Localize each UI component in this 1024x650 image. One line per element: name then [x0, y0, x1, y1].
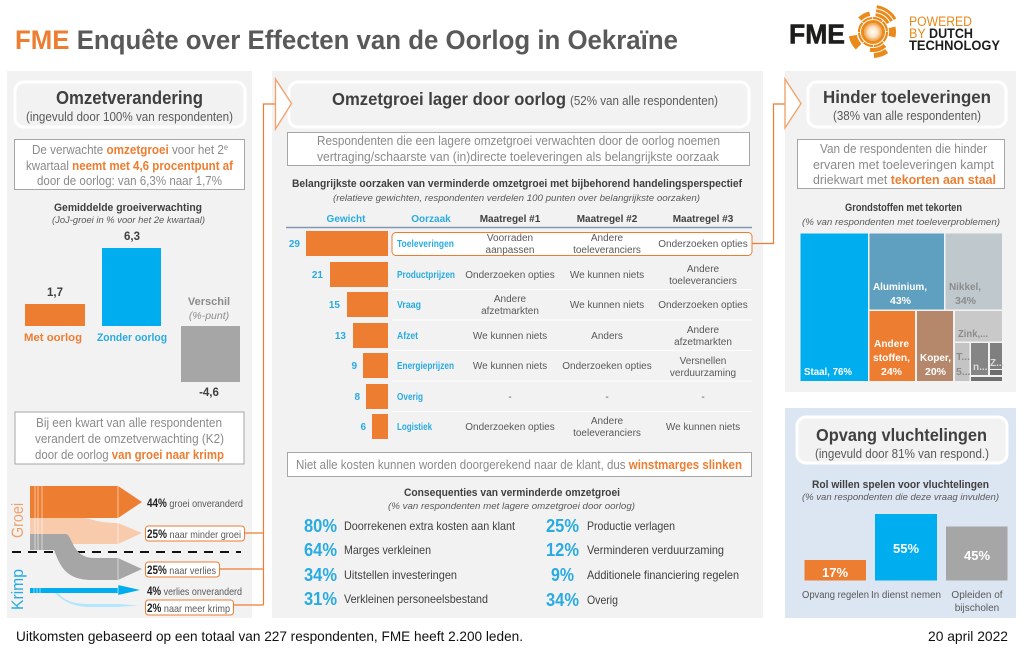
- row: toeleveringen: 29: [289, 239, 300, 250]
- label: 25% naar verlies: 25% naar verlies: [147, 565, 216, 577]
- row: overig: [354, 384, 705, 409]
- treemap: grondstoffen: Z...: [990, 358, 1005, 369]
- row: vraag: 15: [329, 300, 340, 311]
- bar chart: rol vluchtelingen: 45%: [964, 548, 990, 563]
- row: productprijzen: Onderzoeken opties: [465, 270, 555, 281]
- row: productprijzen: toeleveranciers: [669, 276, 737, 287]
- chart heading: rol vluchtelingen: [802, 479, 999, 503]
- list: consequenties rechts: 34%: [546, 590, 579, 610]
- row: logistiek: Andere: [591, 416, 624, 427]
- logo: FME powered by Dutch Technology: TECHNOLOGY: [909, 38, 1000, 53]
- callout: van groei naar krimp: Bij een kwart van alle respondenten: [36, 416, 222, 430]
- panel: opvang vluchtelingen: [785, 408, 1016, 618]
- row: toeleveringen: toeleveranciers: [573, 245, 641, 256]
- list: consequenties rechts: [546, 516, 739, 610]
- list: consequenties links: 34%: [304, 565, 337, 585]
- row: vraag: [329, 292, 748, 317]
- callout: belangrijkste oorzaak: Respondenten die een lagere omzetgroei verwachten door de oorlog noemen: [317, 134, 720, 148]
- treemap: grondstoffen: 5...: [956, 366, 971, 378]
- treemap: grondstoffen: Nikkel,: [949, 281, 981, 293]
- treemap: grondstoffen: 43%: [890, 295, 912, 307]
- panel: omzetgroei lager: [272, 71, 763, 618]
- heading: hinder toeleveringen: (38% van alle respondenten): [833, 109, 981, 123]
- list: consequenties links: 80%: [304, 516, 337, 536]
- heading: hinder toeleveringen: [808, 82, 1006, 127]
- row: afzet: Andere: [687, 325, 720, 336]
- title: FME Enquête over Effecten van de Oorlog in Oekraïne: [15, 25, 678, 55]
- heading: opvang vluchtelingen: [797, 417, 1007, 463]
- bar chart: groeiverwachting: -4,6: [199, 387, 219, 399]
- callout: winstmarges slinken: [288, 452, 752, 476]
- row: toeleveringen: Toeleveringen: [397, 238, 454, 250]
- callout: winstmarges slinken: Niet alle kosten kunnen worden doorgerekend naar de klant, dus winstmarges slinken: [296, 458, 742, 472]
- treemap: grondstoffen: Zink,...: [958, 328, 988, 340]
- bar chart: groeiverwachting: (%-punt): [189, 310, 229, 322]
- bar chart: rol vluchtelingen: Opleiden of: [951, 590, 1003, 601]
- row: energieprijzen: We kunnen niets: [473, 361, 547, 372]
- arrow: midden naar rechts: [752, 104, 785, 244]
- label: 25% naar minder groei: 25% naar minder groei: [147, 529, 241, 541]
- heading: consequenties: (% van respondenten met lagere omzetgroei door oorlog): [388, 501, 635, 512]
- list: consequenties rechts: 9%: [551, 565, 574, 585]
- row: toeleveringen: aanpassen: [486, 245, 534, 256]
- callout: omzetgroei: De verwachte omzetgroei voor het 2: [32, 143, 228, 157]
- bar chart: rol vluchtelingen: In dienst nemen: [871, 590, 941, 601]
- list: consequenties rechts: 12%: [546, 540, 579, 560]
- panel: hinder toeleveringen: [785, 71, 1016, 392]
- list: consequenties links: [304, 516, 516, 609]
- heading: omzetgroei lager door oorlog: (52% van alle respondenten): [570, 94, 718, 108]
- row: productprijzen: Productprijzen: [397, 269, 455, 281]
- chart heading: rol vluchtelingen: Rol willen spelen voor vluchtelingen: [812, 479, 989, 491]
- row: logistiek: Onderzoeken opties: [465, 422, 555, 433]
- list: consequenties rechts: Productie verlagen: [587, 519, 675, 533]
- bar chart: groeiverwachting: 1,7: [47, 287, 63, 299]
- sankey diagram: groei en krimp: Groei: [8, 503, 27, 538]
- callout: tekorten aan staal: driekwart met tekorten aan staal: [813, 173, 996, 187]
- bar chart: rol vluchtelingen: [802, 514, 1008, 614]
- table heading: [292, 178, 742, 204]
- list: consequenties links: Verkleinen personeelsbestand: [344, 592, 488, 606]
- bar chart: groeiverwachting: Met oorlog: [24, 332, 82, 344]
- treemap: grondstoffen: Aluminium,: [873, 281, 927, 293]
- panel: omzetverandering: [7, 71, 252, 618]
- row: overig: 8: [354, 392, 360, 403]
- chart heading: groeiverwachting: [52, 202, 205, 226]
- heading: consequenties: [388, 487, 635, 512]
- heading: omzetgroei lager door oorlog: [289, 82, 749, 127]
- row: energieprijzen: verduurzaming: [670, 368, 736, 379]
- bar chart: groeiverwachting: Verschil: [188, 296, 230, 308]
- treemap: grondstoffen: Andere: [874, 338, 909, 350]
- treemap: grondstoffen: n...: [973, 362, 988, 373]
- list: consequenties links: Uitstellen investeringen: [344, 568, 457, 582]
- row: afzet: 13: [335, 331, 346, 342]
- row: vraag: We kunnen niets: [570, 300, 644, 311]
- row: energieprijzen: [351, 353, 736, 379]
- row: productprijzen: 21: [312, 270, 323, 281]
- row: afzet: Anders: [591, 331, 623, 342]
- bar chart: rol vluchtelingen: 17%: [822, 565, 848, 580]
- heading: omzetgroei lager door oorlog: Omzetgroei lager door oorlog: [332, 89, 566, 109]
- treemap: grondstoffen: [800, 234, 1005, 381]
- row: logistiek: 6: [360, 422, 366, 433]
- table heading: (relatieve gewichten, respondenten verdelen 100 punten over belangrijkste oorzaken): [333, 193, 700, 204]
- label: 4% verlies onveranderd: 4% verlies onveranderd: [147, 586, 242, 598]
- callout: tekorten aan staal: [798, 140, 1004, 188]
- callout: van groei naar krimp: verandert de omzetverwachting (K2): [35, 432, 224, 446]
- list: consequenties links: 31%: [304, 589, 337, 609]
- logo: FME powered by Dutch Technology: POWERED: [909, 14, 972, 29]
- callout: omzetgroei: door de oorlog: van 6,3% naar 1,7%: [37, 174, 222, 188]
- row: afzet: We kunnen niets: [473, 331, 547, 342]
- table header: Maatregel #3: [673, 214, 734, 225]
- treemap: grondstoffen: T...: [956, 351, 970, 363]
- treemap: grondstoffen: Staal, 76%: [804, 366, 853, 378]
- bar chart: rol vluchtelingen: bijscholen: [955, 603, 999, 614]
- logo: FME powered by Dutch Technology: FME: [789, 18, 845, 50]
- callout: omzetgroei: [14, 140, 244, 190]
- chart heading: groeiverwachting: Gemiddelde groeiverwachting: [54, 202, 202, 214]
- row: toeleveringen: Andere: [591, 233, 624, 244]
- row: logistiek: [360, 414, 740, 439]
- list: consequenties rechts: Verminderen verduurzaming: [587, 543, 724, 557]
- bar chart: groeiverwachting: Zonder oorlog: [97, 332, 167, 344]
- row: energieprijzen: Energieprijzen: [397, 360, 454, 372]
- heading: consequenties: Consequenties van verminderde omzetgroei: [404, 487, 620, 499]
- list: consequenties links: Doorrekenen extra kosten aan klant: [344, 519, 516, 533]
- row: toeleveringen: [289, 231, 748, 256]
- bar chart: rol vluchtelingen: 55%: [893, 541, 919, 556]
- treemap: grondstoffen: 34%: [955, 295, 977, 307]
- callout: van groei naar krimp: door de oorlog van groei naar krimp: [35, 448, 224, 462]
- heading: omzetverandering: Omzetverandering: [56, 88, 203, 108]
- callout: van groei naar krimp: [15, 412, 244, 464]
- row: vraag: Onderzoeken opties: [658, 300, 748, 311]
- row: overig: -: [508, 392, 512, 403]
- row: productprijzen: [312, 262, 737, 287]
- logo: FME powered by Dutch Technology: BY DUTCH: [909, 26, 973, 41]
- sankey diagram: groei en krimp: Krimp: [8, 569, 27, 610]
- list: consequenties rechts: Overig: [587, 593, 618, 607]
- logo: FME powered by Dutch Technology: [789, 0, 1000, 65]
- table row separators: [392, 290, 752, 412]
- callout: omzetgroei: kwartaal neemt met 4,6 procentpunt af: [26, 159, 234, 173]
- heading: omzetverandering: (ingevuld door 100% van respondenten): [26, 110, 233, 124]
- footer: respondenten: Uitkomsten gebaseerd op een totaal van 227 respondenten, FME heeft 2.200 leden.: [16, 628, 523, 644]
- chart heading: grondstoffen: [802, 202, 1000, 228]
- row: logistiek: We kunnen niets: [666, 422, 740, 433]
- highlight: rij toeleveringen: [392, 232, 752, 256]
- heading: opvang vluchtelingen: Opvang vluchtelingen: [816, 425, 987, 445]
- treemap: grondstoffen: 20%: [925, 366, 947, 378]
- arrow head: naar hinder toeleveringen: [785, 79, 801, 128]
- row: logistiek: Logistiek: [397, 421, 432, 433]
- row: overig: -: [605, 392, 609, 403]
- row: energieprijzen: Onderzoeken opties: [562, 361, 652, 372]
- list: consequenties rechts: Additionele financiering regelen: [587, 568, 739, 582]
- row: afzet: afzetmarkten: [674, 337, 732, 348]
- table header: Gewicht: [327, 214, 366, 225]
- treemap: grondstoffen: Koper,: [920, 352, 951, 364]
- callout: omzetgroei: e: [224, 143, 229, 152]
- treemap: grondstoffen: 24%: [881, 366, 903, 378]
- chart heading: groeiverwachting: (JoJ-groei in % voor het 2e kwartaal): [52, 215, 205, 226]
- bar chart: groeiverwachting: [24, 231, 240, 399]
- row: vraag: Andere: [494, 294, 527, 305]
- table header: Maatregel #1: [480, 214, 541, 225]
- row: afzet: Afzet: [397, 330, 418, 342]
- heading: opvang vluchtelingen: (ingevuld door 81% van respond.): [815, 447, 989, 461]
- row: logistiek: toeleveranciers: [573, 428, 641, 439]
- bar chart: groeiverwachting: 6,3: [124, 231, 140, 243]
- callout: tekorten aan staal: Van de respondenten die hinder: [820, 142, 987, 156]
- heading: omzetverandering: [15, 82, 245, 127]
- list: consequenties links: Marges verkleinen: [344, 543, 431, 557]
- heading: hinder toeleveringen: Hinder toeleveringen: [823, 87, 991, 107]
- row: afzet: [335, 323, 732, 348]
- row: vraag: afzetmarkten: [481, 306, 539, 317]
- row: toeleveringen: Voorraden: [487, 233, 533, 244]
- callout: belangrijkste oorzaak: vertraging/schaarste van (in)directe toeleveringen als belangrijkste oorzaak: [317, 150, 720, 164]
- row: energieprijzen: Versnellen: [680, 356, 726, 367]
- arrow: links naar midden: [220, 79, 292, 605]
- table header: Maatregel #2: [577, 214, 638, 225]
- treemap: grondstoffen: stoffen,: [873, 352, 910, 364]
- chart heading: rol vluchtelingen: (% van respondenten die deze vraag invulden): [802, 492, 999, 503]
- chart heading: grondstoffen: (% van respondenten met toeleverproblemen): [802, 217, 1000, 228]
- list: consequenties rechts: 25%: [546, 516, 579, 536]
- row: energieprijzen: 9: [351, 361, 357, 372]
- list: consequenties links: 64%: [304, 540, 337, 560]
- footer: datum: 20 april 2022: [928, 628, 1008, 644]
- chart heading: grondstoffen: Grondstoffen met tekorten: [845, 202, 962, 214]
- row: overig: -: [701, 392, 705, 403]
- row: overig: Overig: [397, 391, 423, 403]
- label: 44% groei onveranderd: 44% groei onveranderd: [147, 498, 243, 510]
- bar chart: rol vluchtelingen: Opvang regelen: [802, 590, 869, 601]
- row: toeleveringen: Onderzoeken opties: [658, 239, 748, 250]
- label: 2% naar meer krimp: 2% naar meer krimp: [147, 603, 230, 615]
- table header: Oorzaak: [411, 214, 451, 225]
- callout: belangrijkste oorzaak: [288, 132, 750, 166]
- row: vraag: Vraag: [397, 299, 421, 311]
- row: productprijzen: We kunnen niets: [570, 270, 644, 281]
- table heading: Belangrijkste oorzaken van verminderde omzetgroei met bijbehorend handelingsperspectief: [292, 178, 742, 190]
- row: productprijzen: Andere: [687, 264, 720, 275]
- callout: tekorten aan staal: ervaren met toeleveringen kampt: [813, 158, 995, 172]
- sankey diagram: groei en krimp: [8, 486, 241, 610]
- table header: [286, 214, 752, 228]
